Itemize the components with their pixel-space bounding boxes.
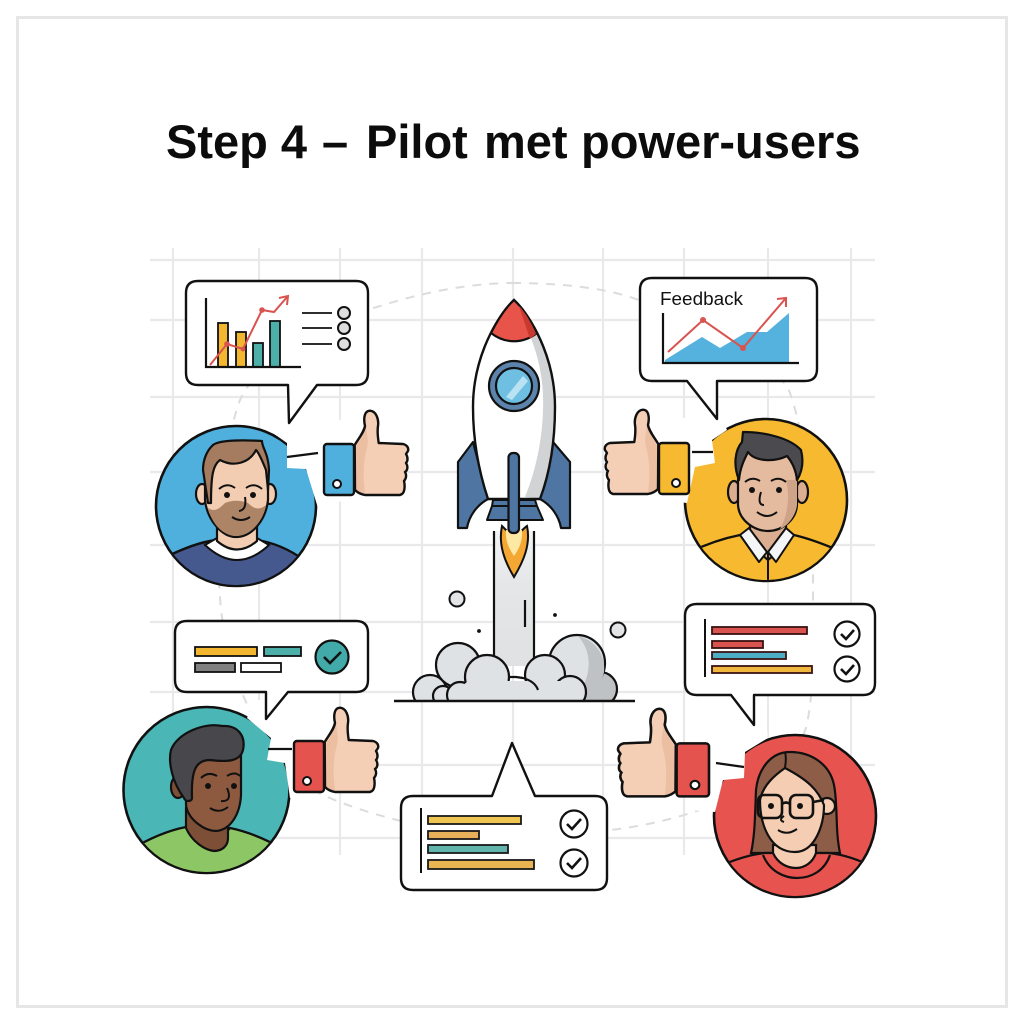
speech bubble with feedback chart: Feedback [660, 288, 744, 309]
dashed orbit ring [218, 283, 813, 833]
rocket porthole [489, 361, 539, 411]
thumbs-up icon [618, 709, 709, 796]
rocket fins [458, 442, 570, 528]
persona 2: yellow, dark-haired man [605, 278, 847, 590]
speech bubble with status bars [175, 621, 368, 719]
smoke particles [450, 592, 626, 638]
circle notch [690, 715, 768, 812]
rocket body [473, 300, 555, 499]
speech bubble with feedback chart [640, 278, 817, 419]
rocket nose cone [491, 300, 537, 341]
persona 4: red, woman with glasses [618, 604, 876, 905]
speech bubble bottom centre with checklist [401, 743, 607, 890]
rocket nozzle [487, 500, 543, 520]
rocket centre fin [508, 453, 519, 533]
speech bubble with checklist [685, 604, 875, 725]
launch ground line [394, 700, 635, 702]
circle notch [660, 415, 727, 503]
connector line [287, 453, 318, 457]
title: power-users [581, 115, 860, 168]
avatar circle [124, 707, 290, 880]
thumbs-up icon [324, 411, 408, 495]
avatar circle [156, 426, 316, 600]
avatar circle [685, 419, 847, 590]
exhaust column [494, 531, 534, 666]
connector line [268, 748, 292, 750]
background grid [150, 248, 875, 855]
rocket launch illustration [394, 300, 635, 709]
avatar circle [714, 735, 876, 905]
title: – [322, 115, 348, 168]
rocket flame [501, 526, 528, 577]
thumbs-up icon [605, 410, 689, 494]
connector line [692, 451, 713, 453]
persona 3: teal, dark-skinned man [124, 621, 378, 880]
connector line [716, 763, 744, 767]
circle notch [247, 700, 320, 798]
title: met [484, 115, 568, 168]
circle notch [270, 418, 345, 508]
title: Step 4 [166, 115, 307, 168]
smoke cloud [413, 635, 617, 709]
thumbs-up icon [294, 708, 378, 792]
speech bubble with bar chart [186, 281, 368, 423]
title: Pilot [366, 115, 468, 168]
persona 1: blue, bearded man [156, 281, 408, 600]
